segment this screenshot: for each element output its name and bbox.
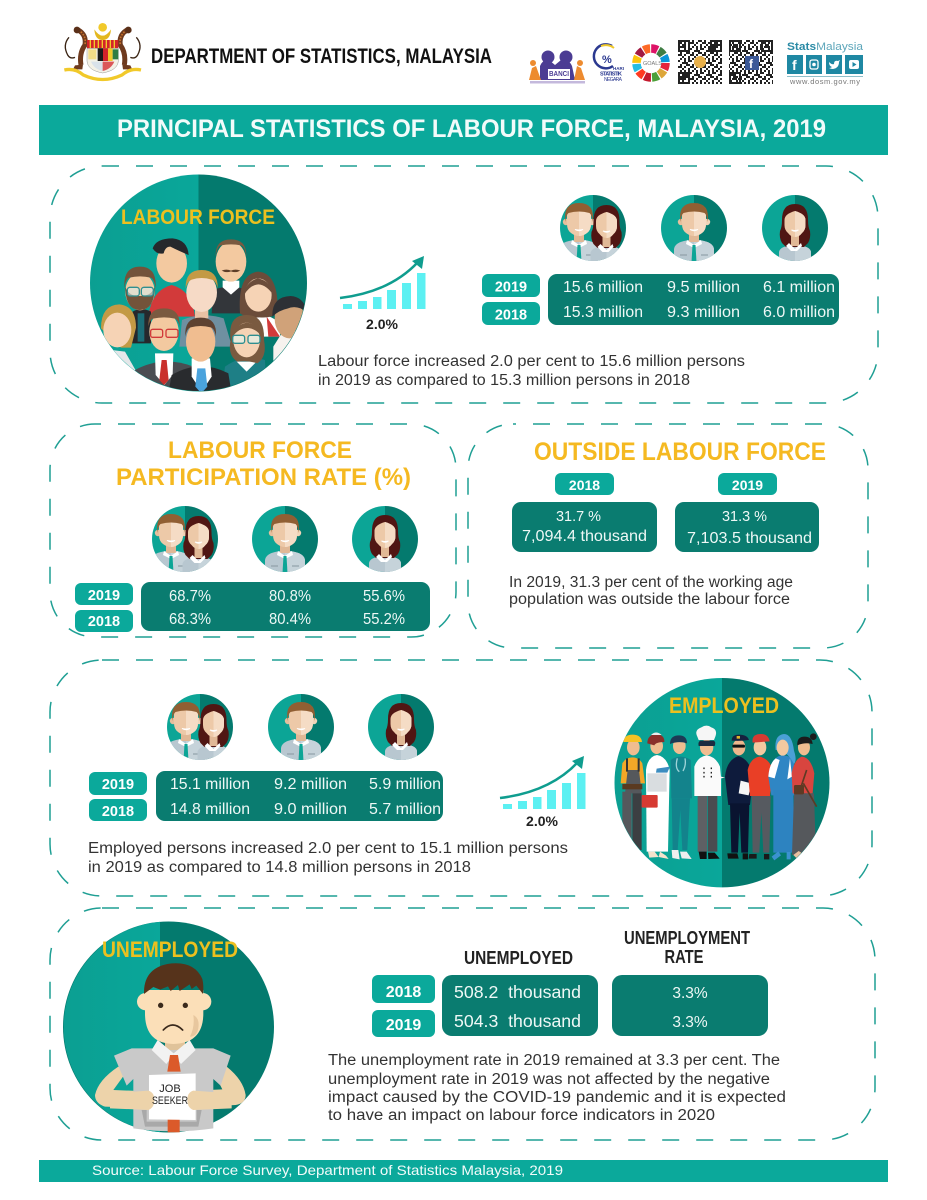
footer: source xyxy=(39,1160,888,1182)
icon: QR code two xyxy=(729,40,773,84)
table: labour force figures: 15.6 million xyxy=(563,279,643,296)
chart: employed growth: 2.0% xyxy=(526,813,559,829)
table: participation rates: 68.7% xyxy=(169,588,211,605)
label: job seeker sign xyxy=(152,1083,188,1107)
table: participation rates: 55.2% xyxy=(363,611,405,628)
table: participation rates: 68.3% xyxy=(169,611,211,628)
icon: male xyxy=(252,506,318,575)
table: employed figures: 2019 xyxy=(102,777,134,793)
text: outside labour force summary xyxy=(509,574,793,608)
text: outside labour force summary: population was outside the labour force xyxy=(509,591,790,608)
icon: national statistics day logo: NEGARA xyxy=(604,77,623,83)
title banner xyxy=(39,105,888,155)
icon: national statistics day logo: % xyxy=(602,54,612,66)
text: employed summary: in 2019 as compared to 14.8 million persons in 2018 xyxy=(88,859,471,876)
text: unemployment summary: unemployment rate in 2019 was not affected by the negative xyxy=(328,1071,770,1088)
panel: employed xyxy=(50,660,872,896)
card: 2019 outside labour force: 2019 xyxy=(732,477,763,493)
title banner: PRINCIPAL STATISTICS OF LABOUR FORCE, MALAYSIA, 2019 xyxy=(117,115,826,143)
heading: outside labour force: OUTSIDE LABOUR FORCE xyxy=(534,438,826,466)
table: employed figures: 14.8 million xyxy=(170,801,250,818)
icon: StatsMalaysia social links: f xyxy=(792,57,797,73)
card: 2019 outside labour force xyxy=(675,473,819,552)
table: employed figures: 9.2 million xyxy=(274,776,347,793)
label: job seeker sign: JOB xyxy=(159,1083,181,1095)
card: 2019 outside labour force: 31.3 % xyxy=(722,508,767,525)
illustration: unemployed job seeker xyxy=(63,922,274,1132)
table: labour force figures: 2019 xyxy=(495,280,527,296)
table: participation rates: 55.6% xyxy=(363,588,405,605)
icon: persons, both sexes xyxy=(166,694,233,764)
icon: SDG wheel xyxy=(636,48,666,78)
table: employed figures: 9.0 million xyxy=(274,801,347,818)
panel: outside labour force xyxy=(468,424,868,648)
table: participation rates: 2019 xyxy=(88,588,120,604)
icon: StatsMalaysia social links xyxy=(787,41,864,86)
icon: female xyxy=(352,506,418,575)
table: unemployed figures: UNEMPLOYMENT xyxy=(624,928,750,948)
table: labour force figures xyxy=(482,274,839,325)
icon: census logo xyxy=(529,50,585,84)
table: labour force figures: 6.0 million xyxy=(763,304,835,321)
icon: coat of arms xyxy=(64,23,141,79)
card: 2018 outside labour force xyxy=(512,473,657,552)
icon: QR code two: f xyxy=(749,57,754,71)
table: labour force figures: 9.3 million xyxy=(667,304,740,321)
table: unemployed figures: RATE xyxy=(664,947,704,967)
table: unemployed figures: UNEMPLOYED xyxy=(464,948,573,968)
icon: male xyxy=(268,694,334,763)
panel: labour force xyxy=(50,166,878,403)
icon: persons, both sexes xyxy=(559,195,626,265)
icon: male xyxy=(661,195,727,264)
icon: SDG wheel: GOALS xyxy=(643,61,662,67)
heading: participation rate: LABOUR FORCE xyxy=(168,437,352,464)
table: employed figures: 5.7 million xyxy=(369,801,441,818)
icon: female xyxy=(762,195,828,264)
card: 2018 outside labour force: 31.7 % xyxy=(556,508,601,525)
header: department identity xyxy=(64,23,864,86)
table: unemployed figures: 3.3% xyxy=(672,1014,708,1031)
text: outside labour force summary: In 2019, 31.3 per cent of the working age xyxy=(509,574,793,591)
table: unemployed figures: 3.3% xyxy=(672,985,708,1002)
panel: unemployed xyxy=(50,908,875,1140)
icon: national statistics day logo: HARI xyxy=(613,66,624,71)
icon: persons, both sexes xyxy=(151,506,218,576)
table: employed figures: 5.9 million xyxy=(369,776,441,793)
table: unemployed figures xyxy=(372,928,768,1037)
text: labour force summary xyxy=(318,353,745,389)
label: employed: EMPLOYED xyxy=(669,693,779,718)
table: employed figures: 2018 xyxy=(102,804,134,820)
text: labour force summary: Labour force increased 2.0 per cent to 15.6 million persons xyxy=(318,353,745,370)
chart: labour force growth xyxy=(340,256,426,332)
text: labour force summary: in 2019 as compared to 15.3 million persons in 2018 xyxy=(318,372,690,389)
label: job seeker sign: SEEKER xyxy=(152,1095,188,1107)
table: labour force figures: 9.5 million xyxy=(667,279,740,296)
table: employed figures xyxy=(89,771,443,821)
table: participation rates: 2018 xyxy=(88,614,120,630)
panel: labour force participation rate xyxy=(50,424,456,637)
text: unemployment summary: to have an impact on labour force indicators in 2020 xyxy=(328,1107,715,1124)
card: 2019 outside labour force: 7,103.5 thousand xyxy=(687,530,812,547)
table: employed figures: 15.1 million xyxy=(170,776,250,793)
icon: StatsMalaysia social links: www.dosm.gov.my xyxy=(789,77,860,86)
icon: StatsMalaysia social links: StatsMalaysia xyxy=(787,41,864,53)
text: unemployment summary: The unemployment rate in 2019 remained at 3.3 per cent. The xyxy=(328,1052,780,1069)
icon: QR code one xyxy=(678,40,722,84)
label: labour force: LABOUR FORCE xyxy=(121,206,275,229)
heading: participation rate: PARTICIPATION RATE (%) xyxy=(116,464,411,491)
table: participation rates xyxy=(75,582,430,632)
text: unemployment summary: impact caused by the COVID-19 pandemic and it is expected xyxy=(328,1089,786,1106)
card: 2018 outside labour force: 7,094.4 thousand xyxy=(522,528,647,545)
illustration: labour force crowd xyxy=(90,174,307,393)
footer: source: Source: Labour Force Survey, Department of Statistics Malaysia, 2019 xyxy=(92,1162,563,1178)
card: 2018 outside labour force: 2018 xyxy=(569,477,600,493)
table: labour force figures: 2018 xyxy=(495,308,527,324)
illustration: employed workers xyxy=(615,678,830,887)
text: employed summary: Employed persons increased 2.0 per cent to 15.1 million persons xyxy=(88,840,568,857)
table: participation rates: 80.8% xyxy=(269,588,311,605)
text: unemployment summary xyxy=(328,1052,786,1124)
table: unemployed figures: 504.3 thousand xyxy=(454,1011,581,1031)
table: labour force figures: 6.1 million xyxy=(763,279,835,296)
table: unemployed figures: 508.2 thousand xyxy=(454,982,581,1002)
table: participation rates: 80.4% xyxy=(269,611,311,628)
icon: census logo: BANCI xyxy=(549,69,569,78)
icon: female xyxy=(368,694,434,763)
chart: labour force growth: 2.0% xyxy=(366,316,399,332)
table: unemployed figures: 2018 xyxy=(386,984,421,1001)
icon: national statistics day logo: STATISTIK xyxy=(600,72,622,78)
heading: participation rate xyxy=(116,437,411,491)
table: labour force figures: 15.3 million xyxy=(563,304,643,321)
icon: national statistics day logo xyxy=(594,44,624,83)
chart: employed growth xyxy=(500,756,586,829)
heading: department name: DEPARTMENT OF STATISTICS, MALAYSIA xyxy=(151,45,492,68)
table: unemployed figures: 2019 xyxy=(386,1017,421,1034)
label: unemployed: UNEMPLOYED xyxy=(102,937,238,962)
text: employed summary xyxy=(88,840,568,876)
